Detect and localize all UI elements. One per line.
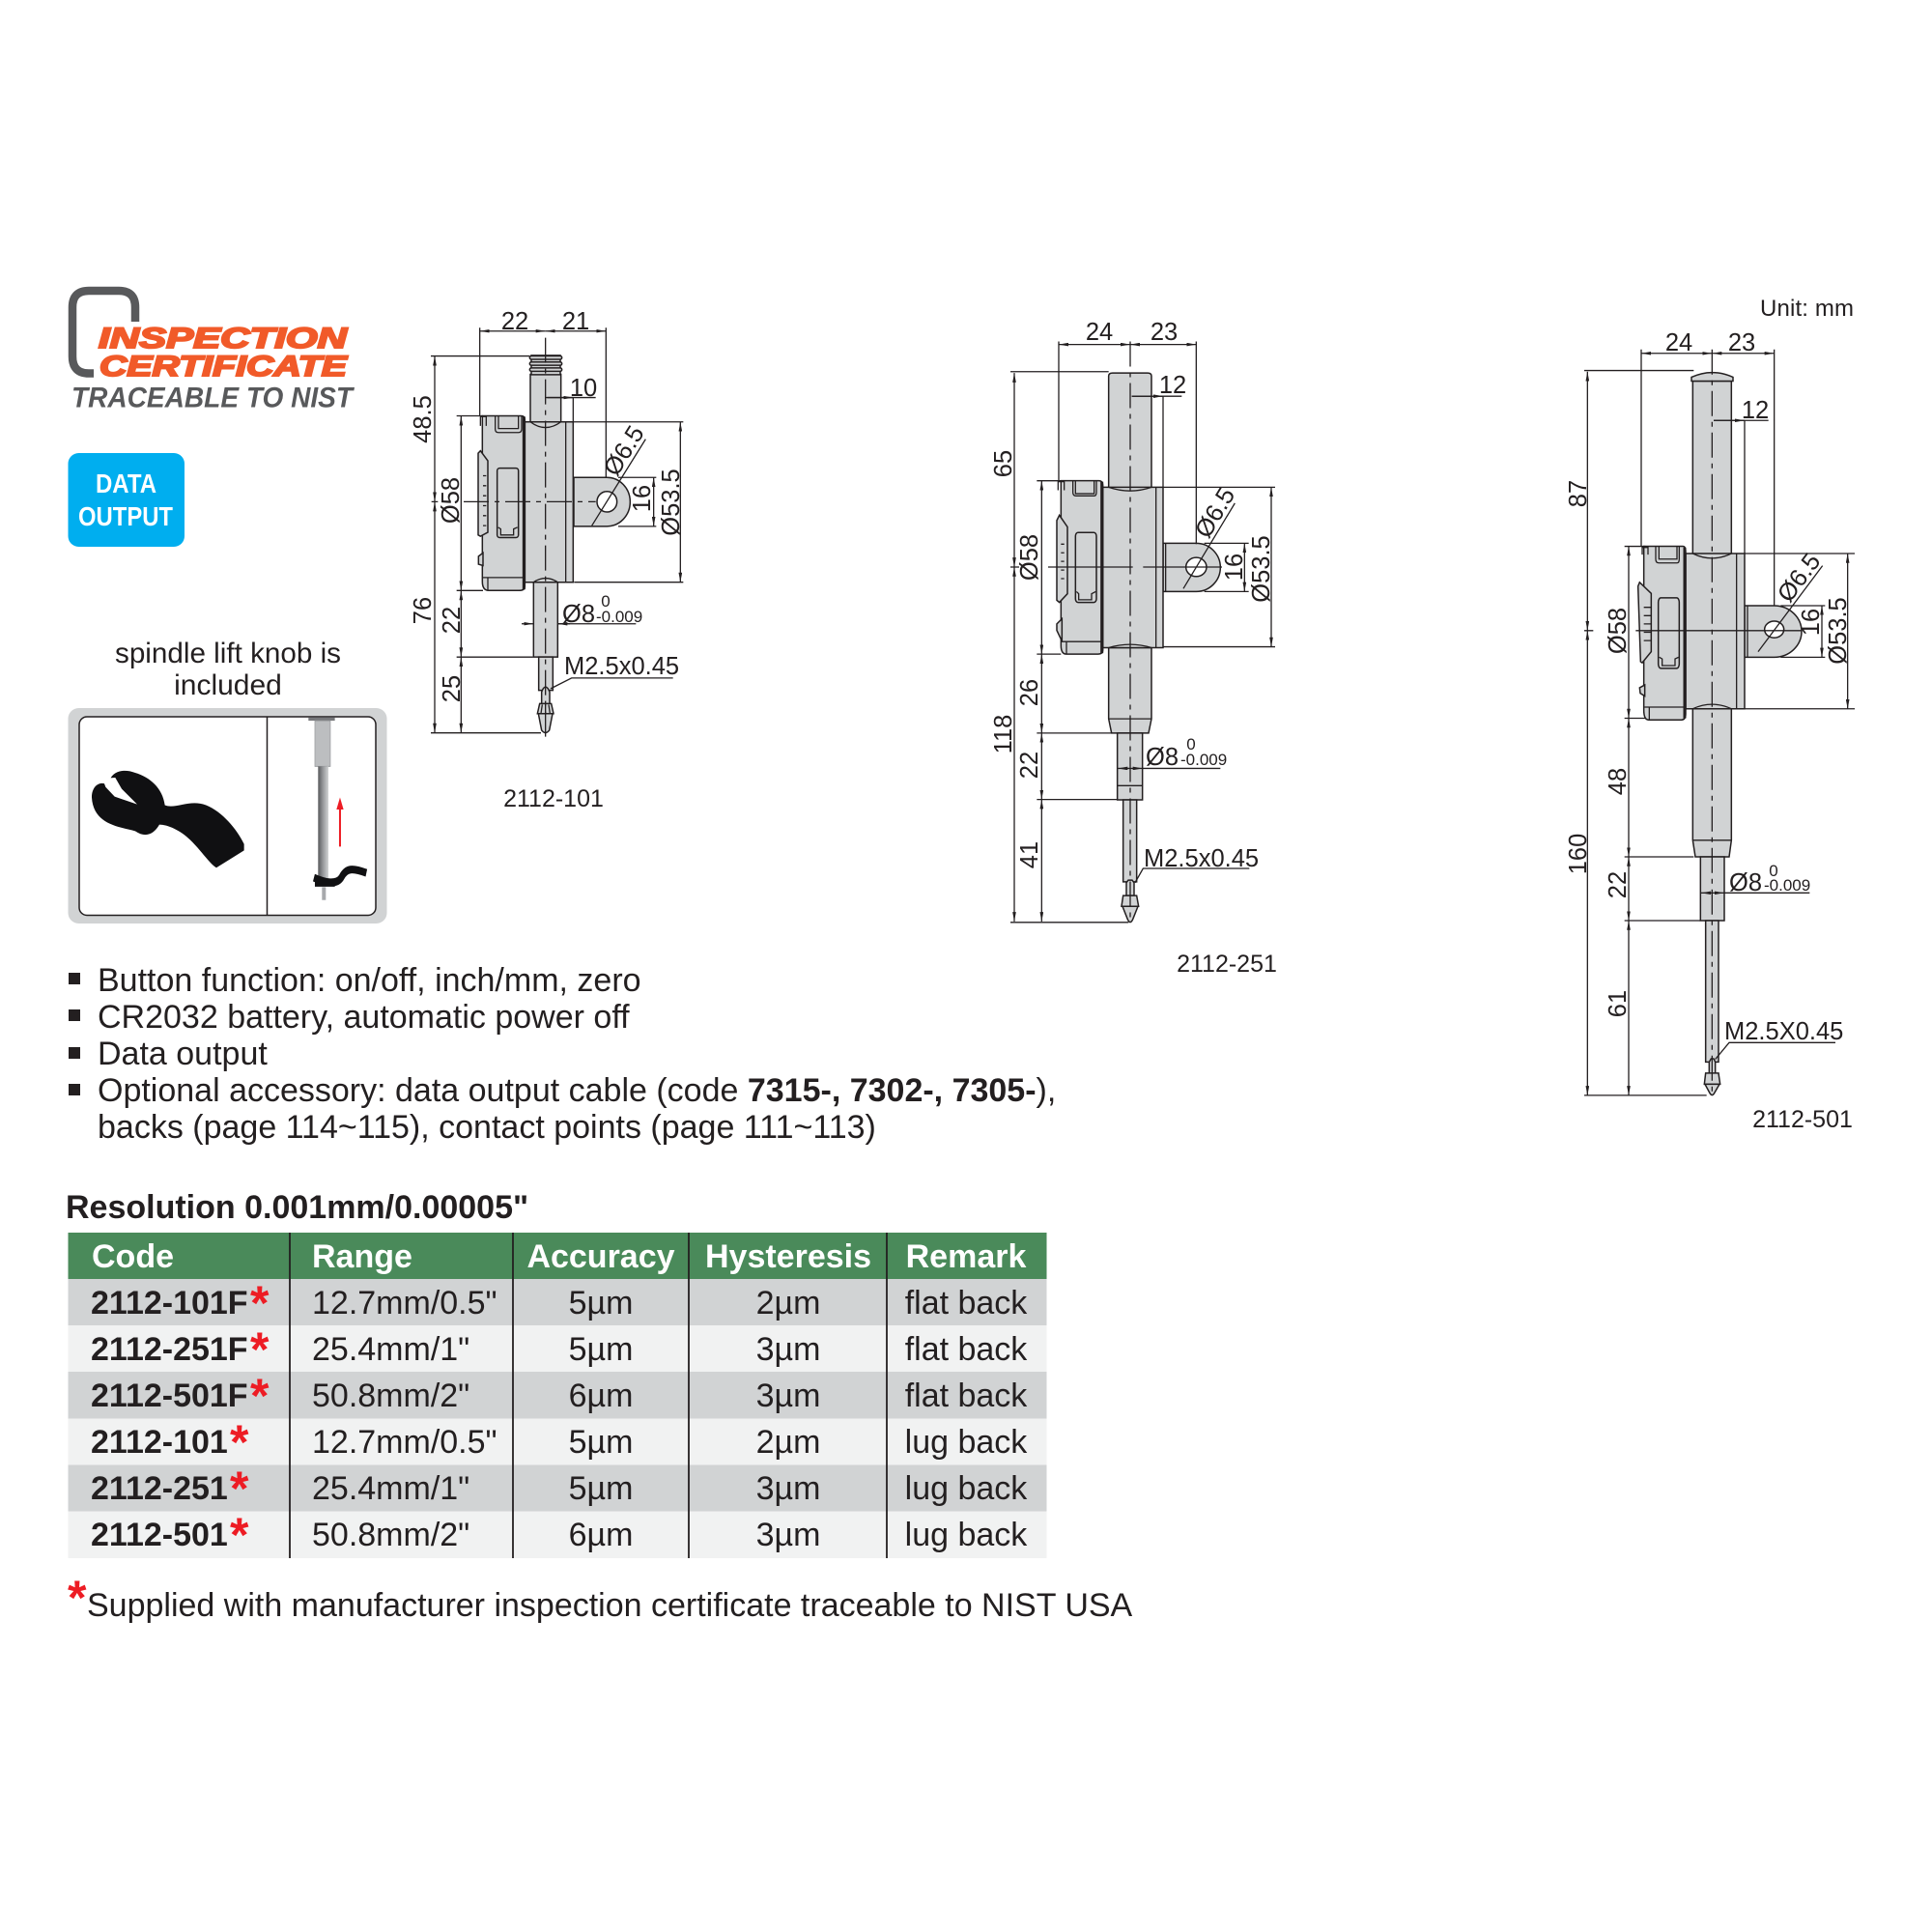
unit note: Unit: mm: [1760, 296, 1854, 322]
row 2112-101: 12.7mm/0.5": [312, 1424, 497, 1461]
row 2112-251F: 3µm: [756, 1331, 820, 1368]
row 2112-101F: [68, 1276, 1047, 1330]
dimension labels 2112-251: 24: [1086, 319, 1113, 346]
dimension labels 2112-501: 22: [1605, 871, 1632, 898]
row 2112-101F: flat back: [905, 1285, 1028, 1321]
dimension labels 2112-251: Ø53.5: [1248, 535, 1275, 603]
gauge outline 2112-251: [1048, 341, 1222, 923]
dimension labels 2112-501: Ø53.5: [1825, 597, 1852, 665]
table header: Code: [92, 1238, 174, 1275]
gauge outline 2112-501: [1635, 350, 1802, 1095]
dimension labels 2112-101: [410, 308, 685, 702]
row 2112-251: 2112-251: [91, 1470, 228, 1507]
dimension labels 2112-251: 118: [990, 715, 1017, 753]
dimension labels 2112-251: 0: [1186, 735, 1196, 753]
dimension labels 2112-501: 48: [1605, 768, 1632, 795]
row 2112-251: *: [230, 1462, 249, 1516]
row 2112-501F: 6µm: [569, 1378, 633, 1414]
logo: inspection certificate traceable to NIST: [71, 291, 355, 413]
dimension lines 2112-251: [1010, 341, 1275, 923]
dimension labels 2112-251: Ø8: [1146, 744, 1179, 771]
dimension labels 2112-501: 160: [1565, 834, 1592, 874]
icon: spindle with knob and arrow: [308, 717, 366, 900]
row 2112-501F: flat back: [905, 1378, 1028, 1414]
logo heading: inspection: INSPECTION: [99, 323, 349, 355]
table header: [68, 1233, 1047, 1279]
dimension labels 2112-101: 21: [562, 308, 589, 335]
dimension labels 2112-101: Ø6.5: [599, 421, 650, 481]
row 2112-251F: 25.4mm/1": [312, 1331, 469, 1368]
dimension labels 2112-101: 48.5: [410, 395, 437, 443]
row 2112-501: *: [230, 1508, 249, 1562]
row 2112-101: lug back: [905, 1424, 1028, 1461]
row 2112-501: 50.8mm/2": [312, 1517, 469, 1553]
footnote: [68, 1571, 1133, 1625]
dimension labels 2112-101: M2.5x0.45: [564, 653, 679, 680]
dimension labels 2112-251: M2.5x0.45: [1144, 845, 1259, 872]
row 2112-251F: flat back: [905, 1331, 1028, 1368]
dimension labels 2112-501: [1565, 329, 1852, 1045]
caption: spindle lift knob: [115, 638, 341, 701]
model label 2112-101: 2112-101: [503, 785, 604, 812]
feature bullet list: Data output: [98, 1036, 268, 1072]
row 2112-501F: *: [250, 1369, 270, 1423]
dimension lines 2112-101: [431, 327, 683, 733]
dimension labels 2112-101: Ø58: [438, 477, 465, 524]
dimension labels 2112-101: 76: [410, 597, 437, 624]
dimension labels 2112-501: Ø8: [1729, 869, 1762, 896]
row 2112-101: 5µm: [569, 1424, 633, 1461]
feature bullet list: CR2032 battery, automatic power off: [98, 999, 630, 1036]
feature bullet list: Optional accessory: data output cable (code 7315-, 7302-, 7305-),: [98, 1072, 1056, 1109]
footnote: Supplied with manufacturer inspection certificate traceable to NIST USA: [87, 1587, 1133, 1624]
dimension labels 2112-251: 22: [1016, 752, 1043, 779]
dimension labels 2112-251: Ø58: [1016, 534, 1043, 581]
dimension labels 2112-101: Ø53.5: [658, 469, 685, 536]
table header: Hysteresis: [705, 1238, 871, 1275]
row 2112-101F: 5µm: [569, 1285, 633, 1321]
logo heading: certificate: CERTIFICATE: [99, 351, 348, 383]
dimension lines 2112-501: [1584, 350, 1855, 1095]
dimension labels 2112-501: 0: [1769, 862, 1778, 880]
row 2112-501F: [68, 1369, 1047, 1423]
dimension labels 2112-501: 87: [1565, 480, 1592, 507]
table heading: Resolution 0.001mm/0.00005": [66, 1189, 528, 1226]
row 2112-101F: 12.7mm/0.5": [312, 1285, 497, 1321]
row 2112-501F: 3µm: [756, 1378, 820, 1414]
row 2112-251F: 2112-251F: [91, 1331, 248, 1368]
dimension labels 2112-501: Ø58: [1605, 608, 1632, 654]
dimension labels 2112-101: 25: [439, 675, 466, 702]
dimension labels 2112-501: 61: [1605, 990, 1632, 1017]
row 2112-251: lug back: [905, 1470, 1028, 1507]
dimension labels 2112-101: 22: [439, 607, 466, 634]
dimension labels 2112-251: 41: [1016, 841, 1043, 868]
dimension labels 2112-101: Ø8: [562, 601, 595, 628]
dimension labels 2112-101: -0.009: [596, 608, 642, 626]
row 2112-101F: 2µm: [756, 1285, 820, 1321]
row 2112-251: 25.4mm/1": [312, 1470, 469, 1507]
dimension labels 2112-501: 23: [1728, 329, 1755, 356]
model label 2112-251: 2112-251: [1177, 951, 1277, 978]
dimension labels 2112-501: M2.5X0.45: [1724, 1018, 1843, 1045]
panel: spindle lift knob photos: [68, 708, 386, 923]
row 2112-251F: [68, 1322, 1047, 1377]
badge: data output: OUTPUT: [78, 501, 173, 531]
table header: Range: [312, 1238, 412, 1275]
row 2112-101F: *: [250, 1276, 270, 1330]
dimension labels 2112-501: Ø6.5: [1773, 549, 1826, 608]
drawing: 2112-101: [410, 308, 685, 812]
row 2112-101F: 2112-101F: [91, 1285, 248, 1321]
row 2112-101: 2112-101: [91, 1424, 228, 1461]
dimension labels 2112-101: 10: [570, 375, 597, 402]
dimension labels 2112-251: 65: [990, 450, 1017, 477]
row 2112-501: lug back: [905, 1517, 1028, 1553]
dimension labels 2112-101: 0: [601, 592, 611, 611]
dimension labels 2112-251: [990, 319, 1275, 872]
row 2112-501: [68, 1508, 1047, 1562]
row 2112-101: 2µm: [756, 1424, 820, 1461]
dimension labels 2112-501: -0.009: [1764, 876, 1810, 895]
dimension labels 2112-251: -0.009: [1180, 751, 1227, 769]
drawing: 2112-501: [1565, 296, 1855, 1133]
row 2112-251: 3µm: [756, 1470, 820, 1507]
icon: lift knob: [92, 771, 244, 867]
dimension labels 2112-251: Ø6.5: [1190, 483, 1240, 543]
row 2112-251F: *: [250, 1322, 270, 1377]
row 2112-251: 5µm: [569, 1470, 633, 1507]
caption: spindle lift knob: spindle lift knob is: [115, 638, 341, 669]
row 2112-501: 3µm: [756, 1517, 820, 1553]
row 2112-251F: 5µm: [569, 1331, 633, 1368]
row 2112-501: 2112-501: [91, 1517, 228, 1553]
row 2112-501F: 2112-501F: [91, 1378, 248, 1414]
dimension labels 2112-251: 12: [1159, 372, 1186, 399]
row 2112-101: *: [230, 1415, 249, 1469]
table header: Accuracy: [526, 1238, 675, 1275]
footnote: *: [68, 1571, 87, 1625]
icon: grey bracket: [72, 291, 135, 373]
dimension labels 2112-251: 23: [1151, 319, 1178, 346]
badge: data output: DATA: [96, 469, 156, 498]
feature bullet list: backs (page 114~115), contact points (page 111~113): [98, 1109, 876, 1146]
dimension labels 2112-251: 16: [1221, 554, 1248, 581]
dimension labels 2112-251: 26: [1016, 679, 1043, 706]
table header: Remark: [906, 1238, 1026, 1275]
logo subtitle: TRACEABLE TO NIST: [71, 383, 355, 413]
row 2112-251: [68, 1462, 1047, 1516]
dimension labels 2112-101: 16: [629, 485, 656, 512]
specification table: [68, 1233, 1047, 1562]
dimension labels 2112-501: 12: [1742, 397, 1769, 424]
caption: spindle lift knob: included: [174, 669, 282, 701]
gauge outline 2112-101: [464, 338, 630, 743]
row 2112-501F: 50.8mm/2": [312, 1378, 469, 1414]
model label 2112-501: 2112-501: [1752, 1106, 1853, 1133]
row 2112-101: [68, 1415, 1047, 1469]
dimension labels 2112-501: 24: [1665, 329, 1692, 356]
feature bullet list: Button function: on/off, inch/mm, zero: [98, 962, 641, 999]
drawing: 2112-251: [990, 319, 1277, 978]
badge: data output: [68, 453, 185, 547]
dimension labels 2112-101: 22: [501, 308, 528, 335]
feature bullet list: [69, 962, 1056, 1146]
row 2112-501: 6µm: [569, 1517, 633, 1553]
dimension labels 2112-501: 16: [1798, 609, 1825, 636]
